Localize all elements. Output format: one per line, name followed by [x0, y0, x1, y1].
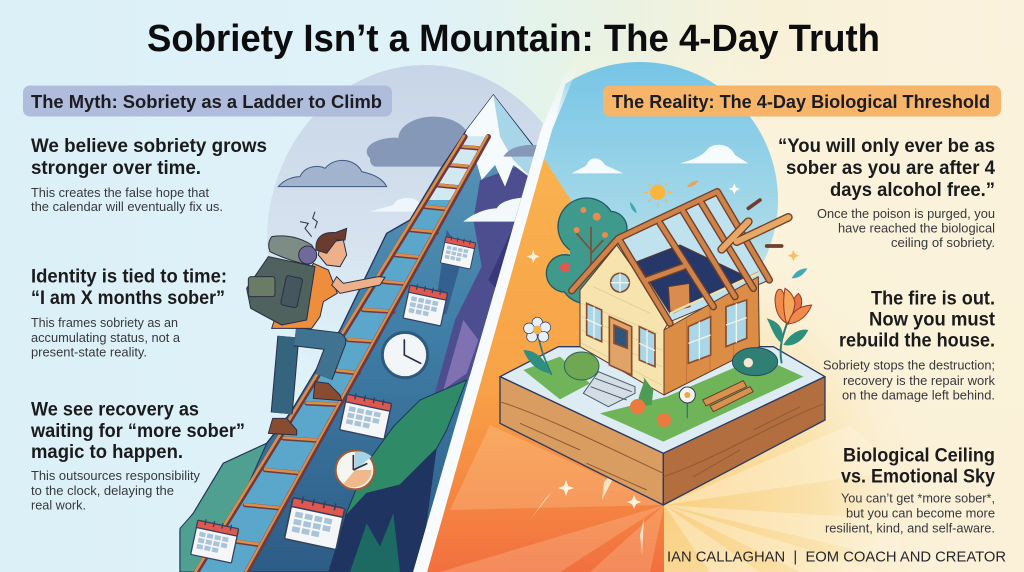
text block: reality 3: but you can become more: [846, 506, 995, 520]
text block: reality 3: Biological Ceiling: [843, 444, 995, 466]
icon: clock 2: [336, 451, 374, 489]
text block: reality 1: “You will only ever be as: [778, 135, 995, 157]
text block: reality 3: You can’t get *more sober*,: [841, 492, 995, 506]
text block: reality 3: [825, 444, 995, 536]
stripe divider: [413, 62, 580, 572]
heading pill: the reality: The Reality: The 4-Day Biological Threshold: [612, 91, 990, 112]
house walls: [580, 192, 769, 395]
head: [318, 240, 347, 267]
front leg: [295, 337, 337, 377]
ladder: [196, 136, 488, 572]
text block: myth 1: stronger over time.: [31, 157, 201, 179]
platform: [500, 347, 825, 505]
text block: reality 2: Sobriety stops the destruction;: [823, 358, 995, 372]
text block: reality 2: [823, 288, 996, 402]
text block: myth 2: accumulating status, not a: [31, 331, 180, 345]
text block: reality 1: days alcohol free.”: [830, 179, 995, 201]
heading pill: the reality: [603, 86, 1001, 116]
title: Sobriety Isn’t a Mountain: The 4-Day Truth: [147, 18, 880, 60]
text block: reality 2: on the damage left behind.: [842, 388, 995, 402]
dark cloud: [367, 117, 470, 167]
text block: myth 3: to the clock, delaying the: [31, 484, 174, 498]
bedroll: [269, 236, 317, 265]
text block: reality 2: Now you must: [869, 308, 995, 330]
climber figure: [247, 228, 385, 435]
text block: reality 2: rebuild the house.: [839, 330, 995, 352]
text block: reality 1: sober as you are after 4: [786, 157, 995, 179]
flower: daisy: [523, 317, 552, 375]
text block: reality 3: resilient, kind, and self-aware.: [825, 522, 995, 536]
text block: reality 1: Once the poison is purged, you: [817, 207, 995, 221]
text block: reality 2: The fire is out.: [871, 288, 995, 310]
mountain: [180, 95, 560, 572]
decorative sparkles: [558, 480, 641, 509]
text block: reality 1: ceiling of sobriety.: [891, 236, 995, 250]
icon: sun: [644, 178, 672, 207]
text block: myth 3: [30, 398, 245, 512]
text block: myth 2: [31, 266, 227, 360]
backpack: [247, 257, 315, 325]
text block: myth 1: We believe sobriety grows: [31, 135, 267, 157]
boots: [268, 382, 342, 435]
text block: myth 2: Identity is tied to time:: [31, 266, 227, 288]
text block: myth 1: the calendar will eventually fix us.: [31, 200, 223, 214]
flower: tulip: [767, 288, 812, 363]
small white cloud: [371, 198, 420, 212]
icon: clock 1: [382, 332, 428, 378]
illustration: house on platform: [500, 145, 825, 505]
text block: myth 3: real work.: [31, 498, 86, 512]
text block: myth 2: This frames sobriety as an: [31, 316, 178, 330]
text block: reality 1: [778, 135, 995, 250]
plank pile: [703, 381, 753, 412]
sparkles and leaves: [527, 181, 807, 278]
text block: myth 3: waiting for “more sober”: [30, 420, 245, 442]
torso: [272, 263, 337, 328]
author credit: IAN CALLAGHAN | EOM COACH AND CREATOR: [667, 548, 1006, 566]
icon: calendar 1: [440, 235, 476, 269]
panel: myth illustration: [180, 65, 583, 572]
clouds: [572, 145, 748, 173]
text block: myth 1: This creates the false hope that: [31, 186, 210, 200]
grass: [523, 357, 803, 442]
text block: myth 2: “I am X months sober”: [31, 287, 225, 309]
wall boards: [582, 272, 758, 385]
door and windows: [587, 273, 747, 375]
panel: reality background: [427, 62, 894, 572]
shrubs and small flowers: [564, 348, 778, 427]
text block: reality 2: recovery is the repair work: [843, 374, 996, 388]
heading pill: the myth: The Myth: Sobriety as a Ladder to Climb: [31, 91, 382, 112]
left cloud: [278, 160, 387, 187]
text block: myth 3: magic to happen.: [31, 441, 183, 463]
text block: myth 3: We see recovery as: [31, 398, 199, 420]
roof rafters: [572, 192, 788, 323]
icon: calendar 4: [284, 495, 345, 550]
text block: reality 1: have reached the biological: [838, 222, 995, 236]
icon: stress marks: [300, 212, 317, 237]
text block: myth 1: [31, 135, 267, 214]
icon: calendar 5: [191, 518, 239, 563]
back leg: [282, 337, 288, 413]
heading pill: the myth: [23, 86, 392, 116]
grey backdrop: [267, 65, 543, 282]
icon: calendar 3: [340, 392, 392, 439]
steps: [583, 372, 635, 407]
window mullions: [587, 273, 747, 363]
hair: [316, 228, 347, 253]
text block: myth 2: present-state reality.: [31, 346, 147, 360]
text block: reality 3: vs. Emotional Sky: [841, 466, 995, 488]
text block: myth 3: This outsources responsibility: [31, 469, 201, 483]
icon: calendar 2: [403, 283, 448, 326]
arm: [332, 277, 385, 293]
tree: [546, 197, 628, 304]
